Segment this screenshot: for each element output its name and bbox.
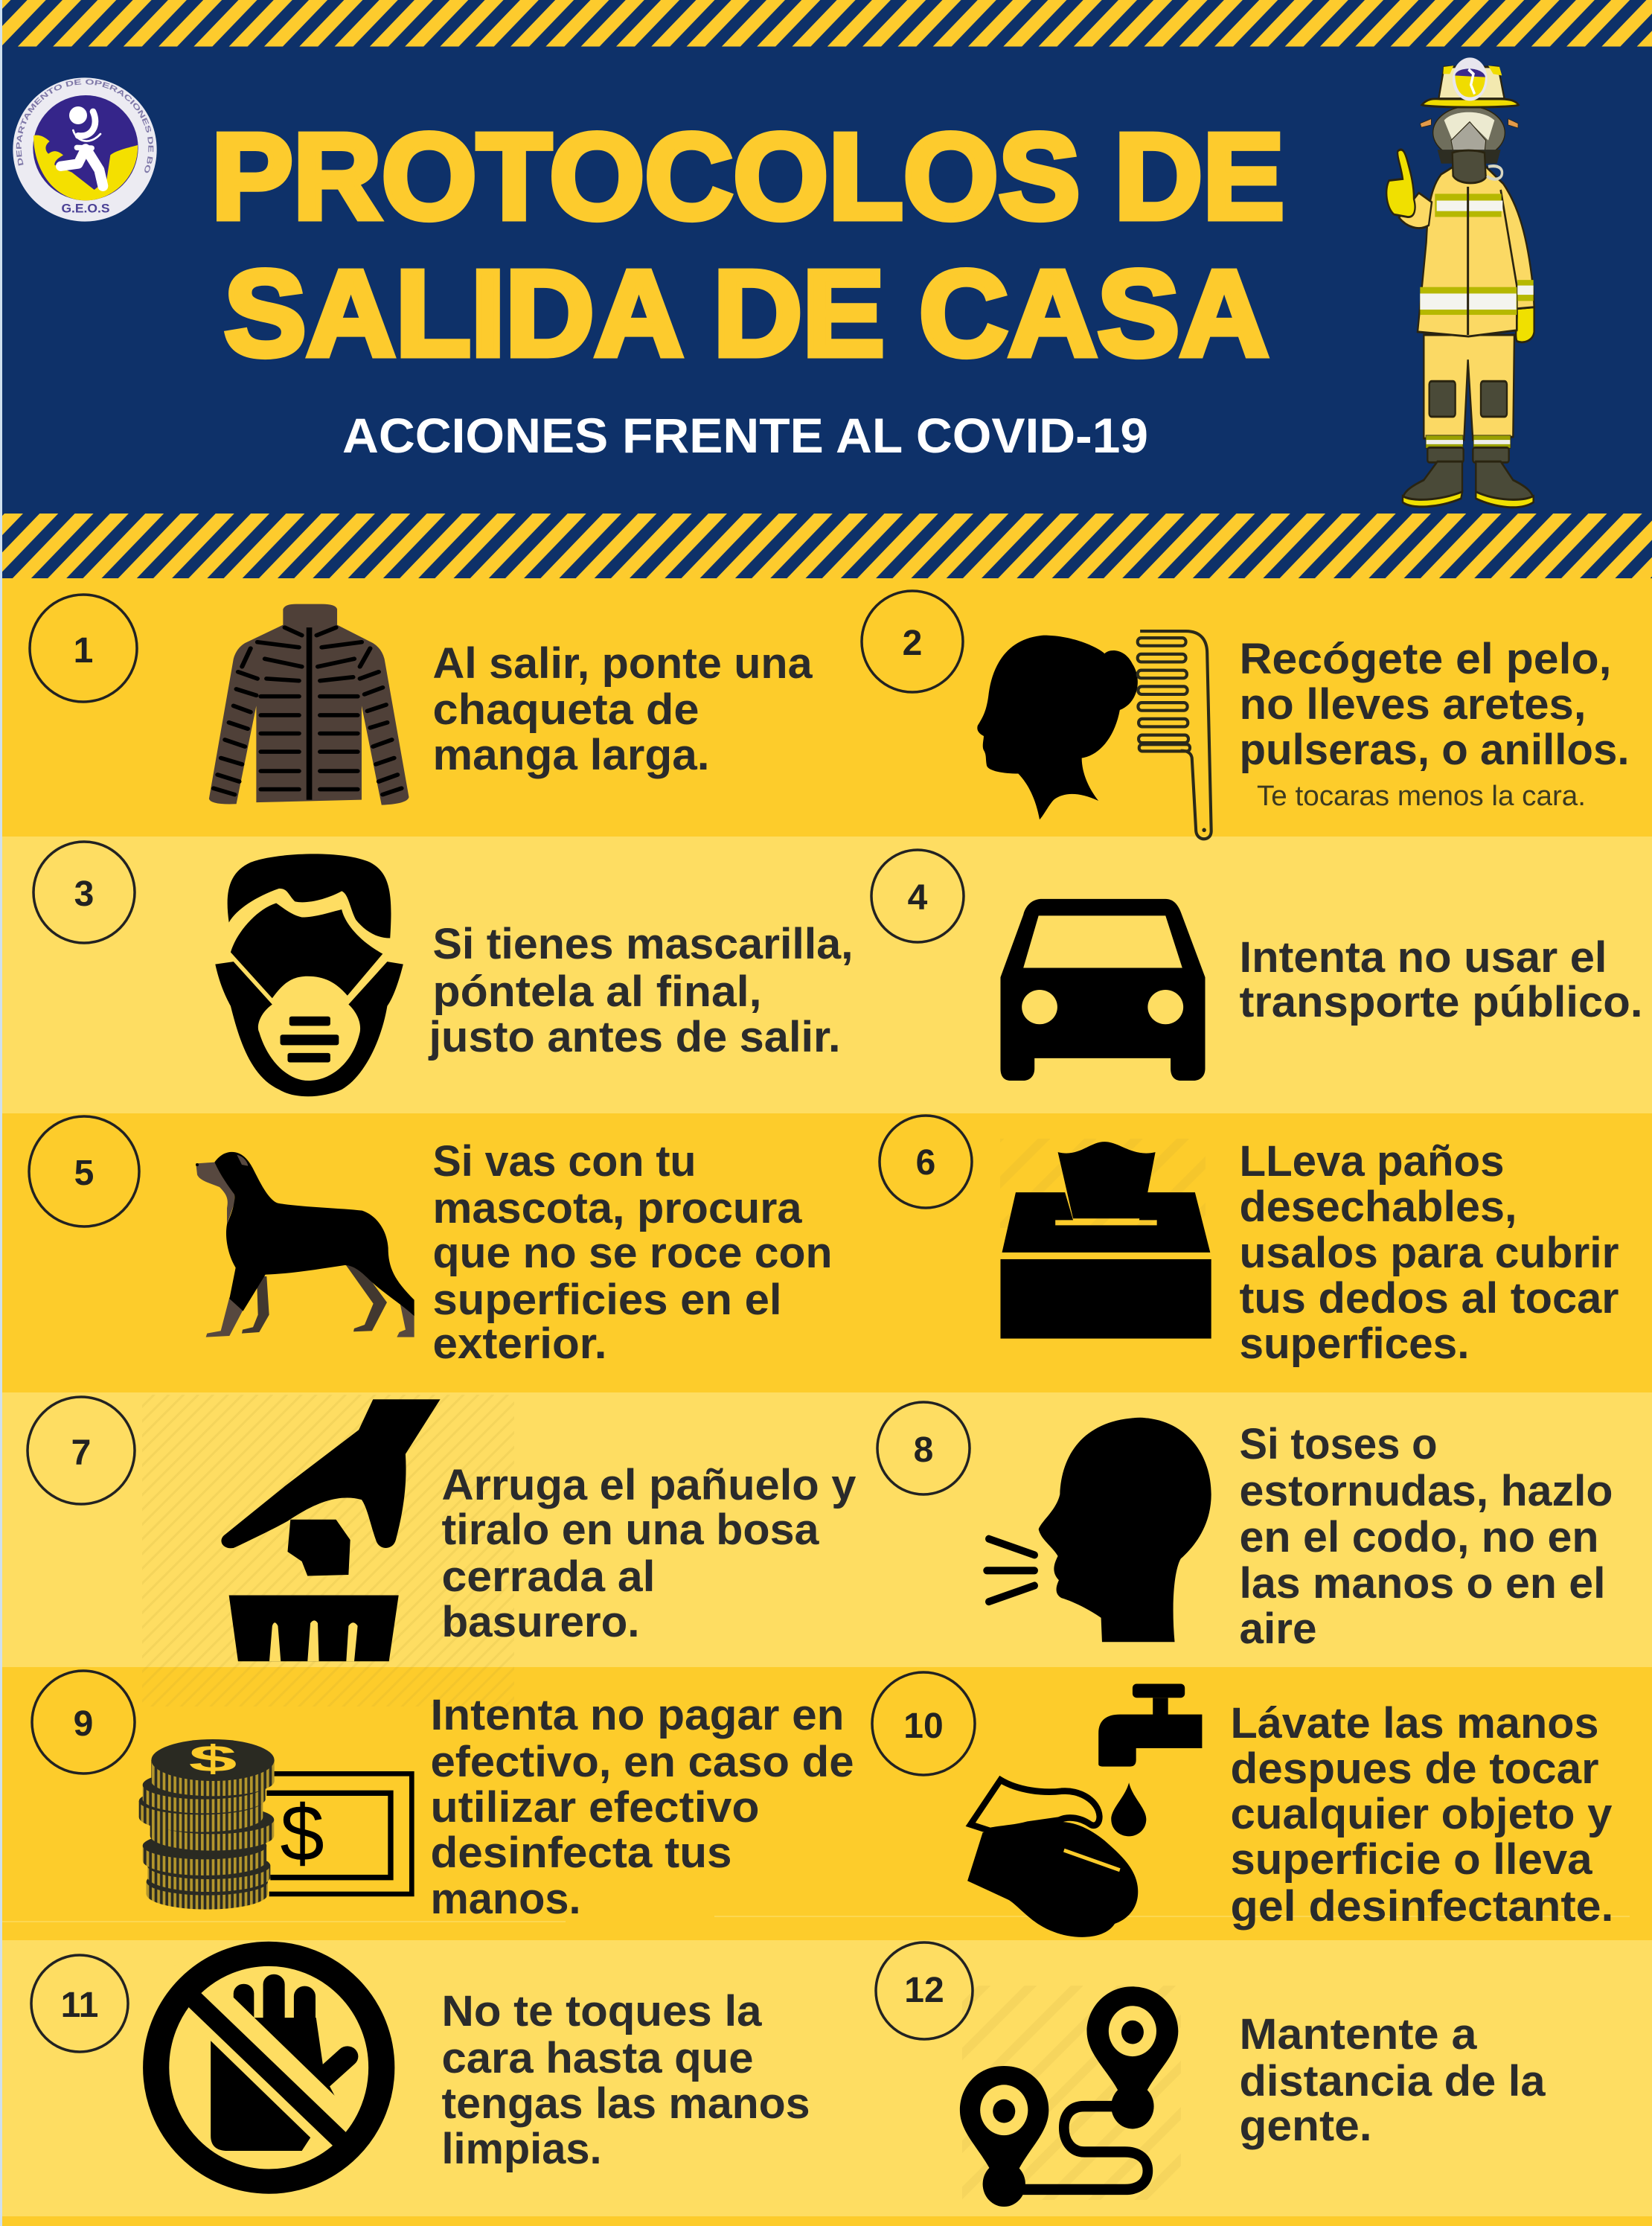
text: step 4: transporte público.	[1240, 978, 1643, 1026]
icon: head sneezing	[987, 1418, 1211, 1642]
text: step 10	[1231, 1699, 1613, 1931]
number badge 8	[877, 1402, 970, 1494]
number badge 8: 8	[914, 1430, 933, 1470]
number badge 12	[876, 1942, 973, 2039]
icon: washing hands under tap	[967, 1683, 1202, 1937]
firefighter illustration	[1386, 57, 1534, 508]
text: step 6: superfices.	[1240, 1320, 1469, 1368]
number badge 10: 10	[903, 1707, 944, 1746]
number badge 1: 1	[74, 631, 93, 671]
icon: jacket	[209, 604, 409, 805]
text: step 6	[1240, 1137, 1619, 1368]
logo: G.E.O.S badge	[13, 77, 157, 222]
number badge 9	[32, 1671, 135, 1774]
text: step 11: No te toques la	[442, 1987, 762, 2035]
text: step 8: estornudas, hazlo	[1240, 1467, 1613, 1515]
icon: person with mask	[215, 854, 403, 1096]
text: step 4	[1240, 933, 1643, 1026]
panel: step 6	[856, 1113, 1652, 1392]
icon: dog	[196, 1152, 414, 1337]
text: step 5: exterior.	[433, 1320, 607, 1368]
text: step 12: Mantente a	[1240, 2010, 1477, 2059]
number badge 7: 7	[71, 1433, 91, 1473]
text: step 7: cerrada al	[442, 1552, 655, 1601]
text: step 5: superficies en el	[433, 1276, 781, 1324]
panel: step 10	[856, 1667, 1652, 1940]
number badge 6	[880, 1116, 972, 1208]
text: step 9: Intenta no pagar en	[430, 1691, 844, 1739]
text: step 7: basurero.	[442, 1598, 640, 1646]
text: step 6: LLeva paños	[1240, 1137, 1505, 1186]
text: step 3	[428, 920, 853, 1061]
text: step 8	[1240, 1420, 1613, 1653]
icon: car	[1000, 899, 1205, 1081]
icon: do not touch hand	[156, 1954, 382, 2181]
text: step 9	[430, 1691, 854, 1923]
text: step 10: superficie o lleva	[1231, 1835, 1592, 1884]
text: step 1: chaqueta de	[433, 685, 699, 734]
text: step 12: distancia de la	[1240, 2057, 1546, 2105]
text: step 3: Si tienes mascarilla,	[433, 920, 853, 968]
number badge 3: 3	[74, 874, 94, 914]
panel: step 1	[0, 578, 856, 837]
text: step 10: Lávate las manos	[1231, 1699, 1598, 1747]
panel: step 2	[856, 578, 1652, 839]
panel: step 12	[856, 1940, 1652, 2216]
text: step 3: justo antes de salir.	[428, 1013, 841, 1061]
bottom hazard stripes	[0, 514, 1652, 578]
number badge 4: 4	[908, 878, 928, 918]
text: step 9: utilizar efectivo	[430, 1783, 759, 1832]
text: step 10: gel desinfectante.	[1231, 1882, 1613, 1931]
text: step 8: aire	[1240, 1605, 1317, 1653]
text: step 1: Al salir, ponte una	[433, 639, 813, 688]
number badge 1	[30, 595, 137, 702]
text: step 11: limpias.	[442, 2125, 601, 2173]
text: step 7	[442, 1461, 856, 1646]
text: step 6: desechables,	[1240, 1183, 1517, 1231]
logo: G.E.O.S badge: DEPARTAMENTO DE OPERACIONES DE BOMBEROS	[16, 79, 153, 173]
text: step 11: tengas las manos	[442, 2079, 810, 2128]
text: step 9: manos.	[430, 1875, 580, 1923]
text: step 1: manga larga.	[433, 731, 710, 779]
number badge 9: 9	[74, 1704, 93, 1744]
text: step 5	[433, 1137, 832, 1368]
text: step 7: Arruga el pañuelo y	[442, 1461, 856, 1509]
text: step 2: Recógete el pelo,	[1240, 635, 1612, 683]
subtitle: ACCIONES FRENTE AL COVID-19	[342, 408, 1148, 463]
number badge 4	[871, 850, 964, 942]
panel: step 4	[856, 837, 1652, 1113]
title: SALIDA DE CASA	[224, 246, 1269, 381]
number badge 6: 6	[916, 1143, 935, 1183]
text: step 8: en el codo, no en	[1240, 1513, 1598, 1561]
text: step 4: Intenta no usar el	[1240, 933, 1607, 982]
icon: coins and banknote	[139, 1739, 412, 1910]
icon: coins and banknote: $	[188, 1739, 237, 1780]
number badge 2	[862, 591, 963, 692]
panel: step 9	[0, 1667, 856, 1940]
text: step 9: efectivo, en caso de	[430, 1738, 854, 1786]
number badge 5: 5	[74, 1154, 94, 1193]
top hazard stripes	[0, 0, 1652, 46]
text: step 8: las manos o en el	[1240, 1559, 1606, 1608]
number badge 2: 2	[903, 624, 922, 663]
number badge 5	[29, 1116, 139, 1226]
panel: step 8	[856, 1392, 1652, 1667]
panel: step 7	[0, 1392, 856, 1667]
number badge 12: 12	[904, 1971, 944, 2010]
text: step 9: desinfecta tus	[430, 1829, 732, 1877]
title	[211, 109, 1284, 381]
icon: hand dropping tissue in bin	[221, 1399, 441, 1661]
number badge 11: 11	[61, 1986, 98, 2025]
text: step 6: tus dedos al tocar	[1240, 1274, 1619, 1323]
panel: step 3	[0, 837, 856, 1113]
header panel	[2, 0, 1652, 578]
text: step 6: usalos para cubrir	[1240, 1229, 1619, 1277]
text: step 12: gente.	[1240, 2102, 1372, 2150]
text: step 5: mascota, procura	[433, 1184, 802, 1232]
text: step 5: que no se roce con	[433, 1229, 832, 1277]
text: step 12	[1240, 2010, 1546, 2150]
number badge 3	[33, 842, 135, 943]
logo: G.E.O.S badge: G.E.O.S	[61, 202, 109, 216]
text: step 10: despues de tocar	[1231, 1744, 1598, 1793]
text: step 2: Te tocaras menos la cara.	[1257, 781, 1586, 812]
text: step 1	[433, 639, 813, 779]
panel: step 5	[0, 1113, 856, 1392]
text: step 3: póntela al final,	[433, 968, 762, 1016]
text: step 2: pulseras, o anillos.	[1240, 726, 1630, 774]
text: step 11	[442, 1987, 810, 2173]
icon: tissue box	[1000, 1142, 1211, 1339]
title: PROTOCOLOS DE	[211, 109, 1284, 244]
number badge 11	[31, 1955, 128, 2052]
text: step 2: no lleves aretes,	[1240, 680, 1587, 729]
text: step 5: Si vas con tu	[433, 1137, 697, 1186]
panel: step 11	[0, 1940, 856, 2216]
icon: route with two map pins	[960, 1986, 1178, 2207]
icon: woman profile and comb	[977, 631, 1211, 839]
icon: coins and banknote: $	[280, 1788, 324, 1878]
number badge 7	[28, 1397, 135, 1504]
text: step 2	[1240, 635, 1630, 812]
number badge 10	[872, 1672, 975, 1775]
text: step 11: cara hasta que	[442, 2034, 753, 2082]
text: step 7: tiralo en una bosa	[442, 1506, 819, 1554]
text: step 8: Si toses o	[1240, 1420, 1438, 1468]
text: step 10: cualquier objeto y	[1231, 1790, 1612, 1838]
